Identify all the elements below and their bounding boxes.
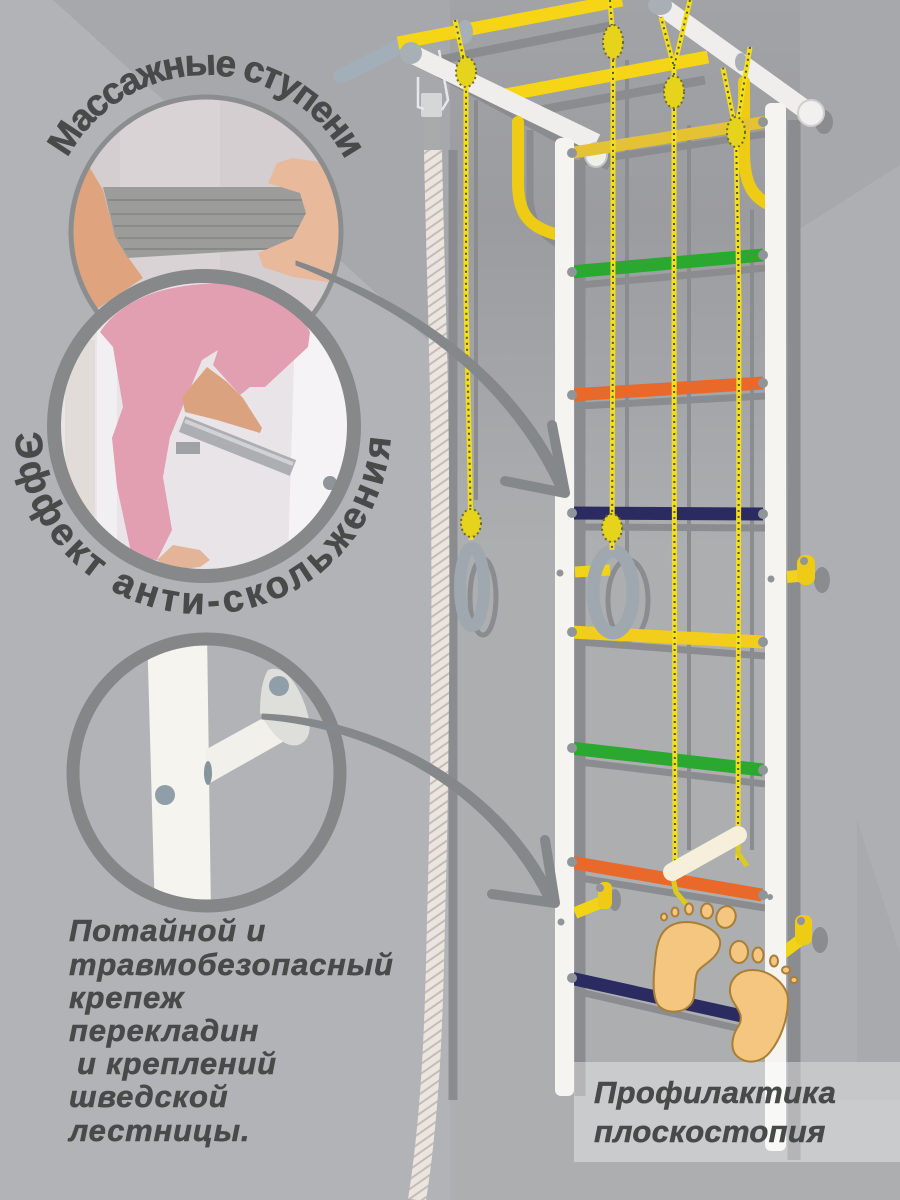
rope metal clamp and carabiner [418,50,448,150]
heading: massage steps: Массажные ступени [46,54,362,158]
caption: flat feet prevention: Профилактика [594,1075,836,1110]
frame and ladder shadows [430,26,833,1160]
rope [417,150,440,1200]
text block: fastener description: шведской [69,1079,229,1114]
text block: fastener description [67,913,394,1148]
caption: flat feet prevention: плоскостопия [594,1114,826,1149]
text block: fastener description: и креплений [77,1046,277,1081]
left bent handle [518,122,559,235]
wall mount stubs [575,555,815,953]
photo circle: hidden fastener [73,630,340,915]
text block: fastener description: травмобезопасный [69,947,394,982]
top frame [341,0,824,167]
arrow to fastener [262,714,557,904]
climbing ropes [455,0,750,905]
caption: flat feet prevention [594,1075,836,1149]
text block: fastener description: перекладин [69,1013,259,1048]
gymnastic rings [460,548,633,633]
text block: fastener description: Потайной и [69,913,266,948]
arrow to massage rungs [296,261,569,494]
photo circle: massage rung [68,94,344,316]
text block: fastener description: лестницы. [67,1113,250,1148]
heading: anti-slip effect: Эффект анти-скольжения [14,432,391,614]
ladder poles [555,103,786,1151]
trapeze bar [672,835,738,872]
ladder rungs [570,122,765,1016]
text block: fastener description: крепеж [69,980,186,1015]
right bent handle [744,82,776,208]
caption band [574,1062,900,1162]
photo circle: anti-slip [50,270,360,590]
icon: footprints [654,903,798,1062]
